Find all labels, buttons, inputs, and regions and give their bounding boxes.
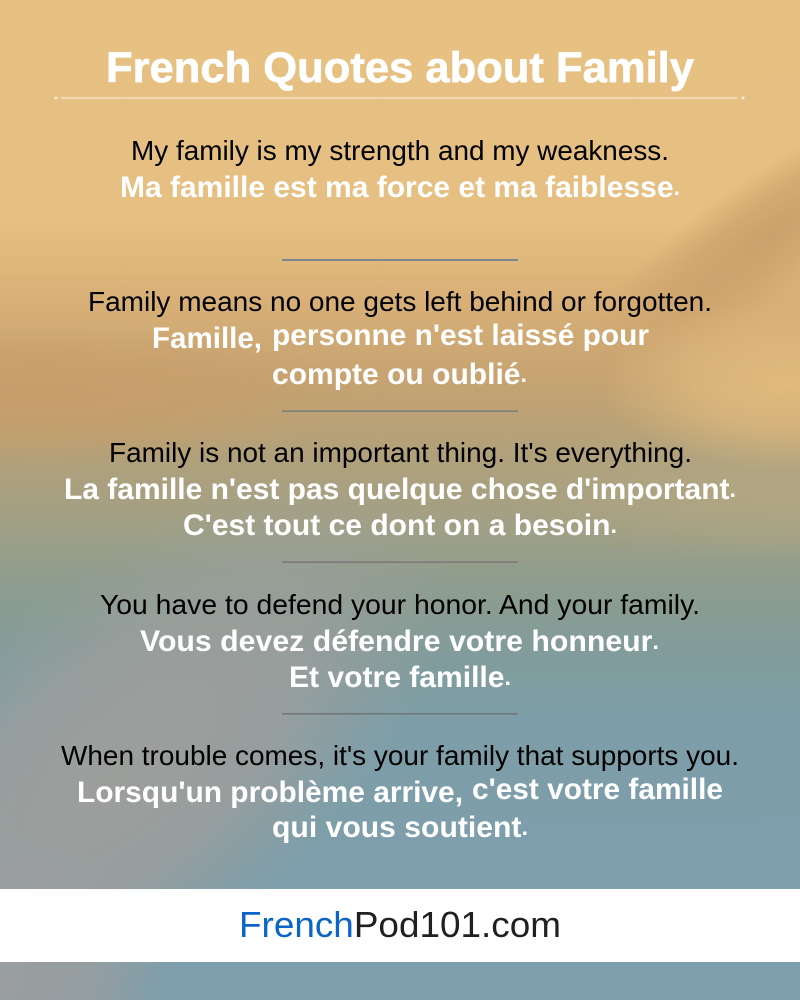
quote 4: You have to defend your honor. And your family. bbox=[100, 589, 700, 620]
title: French Quotes about Family bbox=[106, 44, 694, 92]
quote 4: . bbox=[652, 628, 659, 654]
quote 2 bbox=[88, 286, 712, 391]
quote 2: Family means no one gets left behind or forgotten. bbox=[88, 286, 712, 317]
footer band bbox=[0, 889, 800, 962]
quote 4: . bbox=[504, 664, 511, 690]
quote 1: Ma famille est ma force et ma faiblesse bbox=[120, 171, 664, 204]
quote 5: When trouble comes, it's your family that supports you. bbox=[61, 740, 739, 771]
quote 3: . bbox=[730, 476, 736, 502]
quote 3: C'est tout ce dont on a besoin bbox=[183, 509, 603, 542]
quote 3 bbox=[64, 437, 736, 542]
quote 2: compte ou oublié bbox=[272, 358, 516, 391]
title rule with end dots bbox=[54, 96, 744, 100]
divider 2 bbox=[282, 410, 518, 412]
quote 4 bbox=[100, 589, 700, 694]
quote 3: . bbox=[610, 512, 617, 538]
quote 4: Et votre famille bbox=[289, 661, 500, 694]
quote 3: Family is not an important thing. It's everything. bbox=[109, 437, 692, 468]
quote 1 bbox=[120, 135, 680, 204]
quote 5: c'est votre famille bbox=[472, 773, 723, 806]
quote 5: qui vous soutient bbox=[272, 811, 516, 844]
quote 2: personne n'est laissé pour bbox=[272, 319, 650, 352]
divider 3 bbox=[282, 562, 518, 563]
quote 4: Vous devez défendre votre honneur bbox=[140, 625, 639, 658]
quote 2: Famille, bbox=[152, 322, 262, 355]
quote 5 bbox=[61, 740, 739, 844]
quote 3: La famille n'est pas quelque chose d'important bbox=[64, 473, 719, 506]
divider 1 bbox=[282, 259, 518, 261]
quote 1: My family is my strength and my weakness. bbox=[131, 135, 669, 166]
quote 5: Lorsqu'un problème arrive, bbox=[77, 776, 463, 809]
quote 1: . bbox=[674, 174, 680, 200]
footer logo text: FrenchPod101.com bbox=[239, 904, 561, 945]
divider 4 bbox=[282, 713, 518, 714]
quote 5: . bbox=[521, 814, 528, 840]
quote 2: . bbox=[520, 361, 527, 387]
